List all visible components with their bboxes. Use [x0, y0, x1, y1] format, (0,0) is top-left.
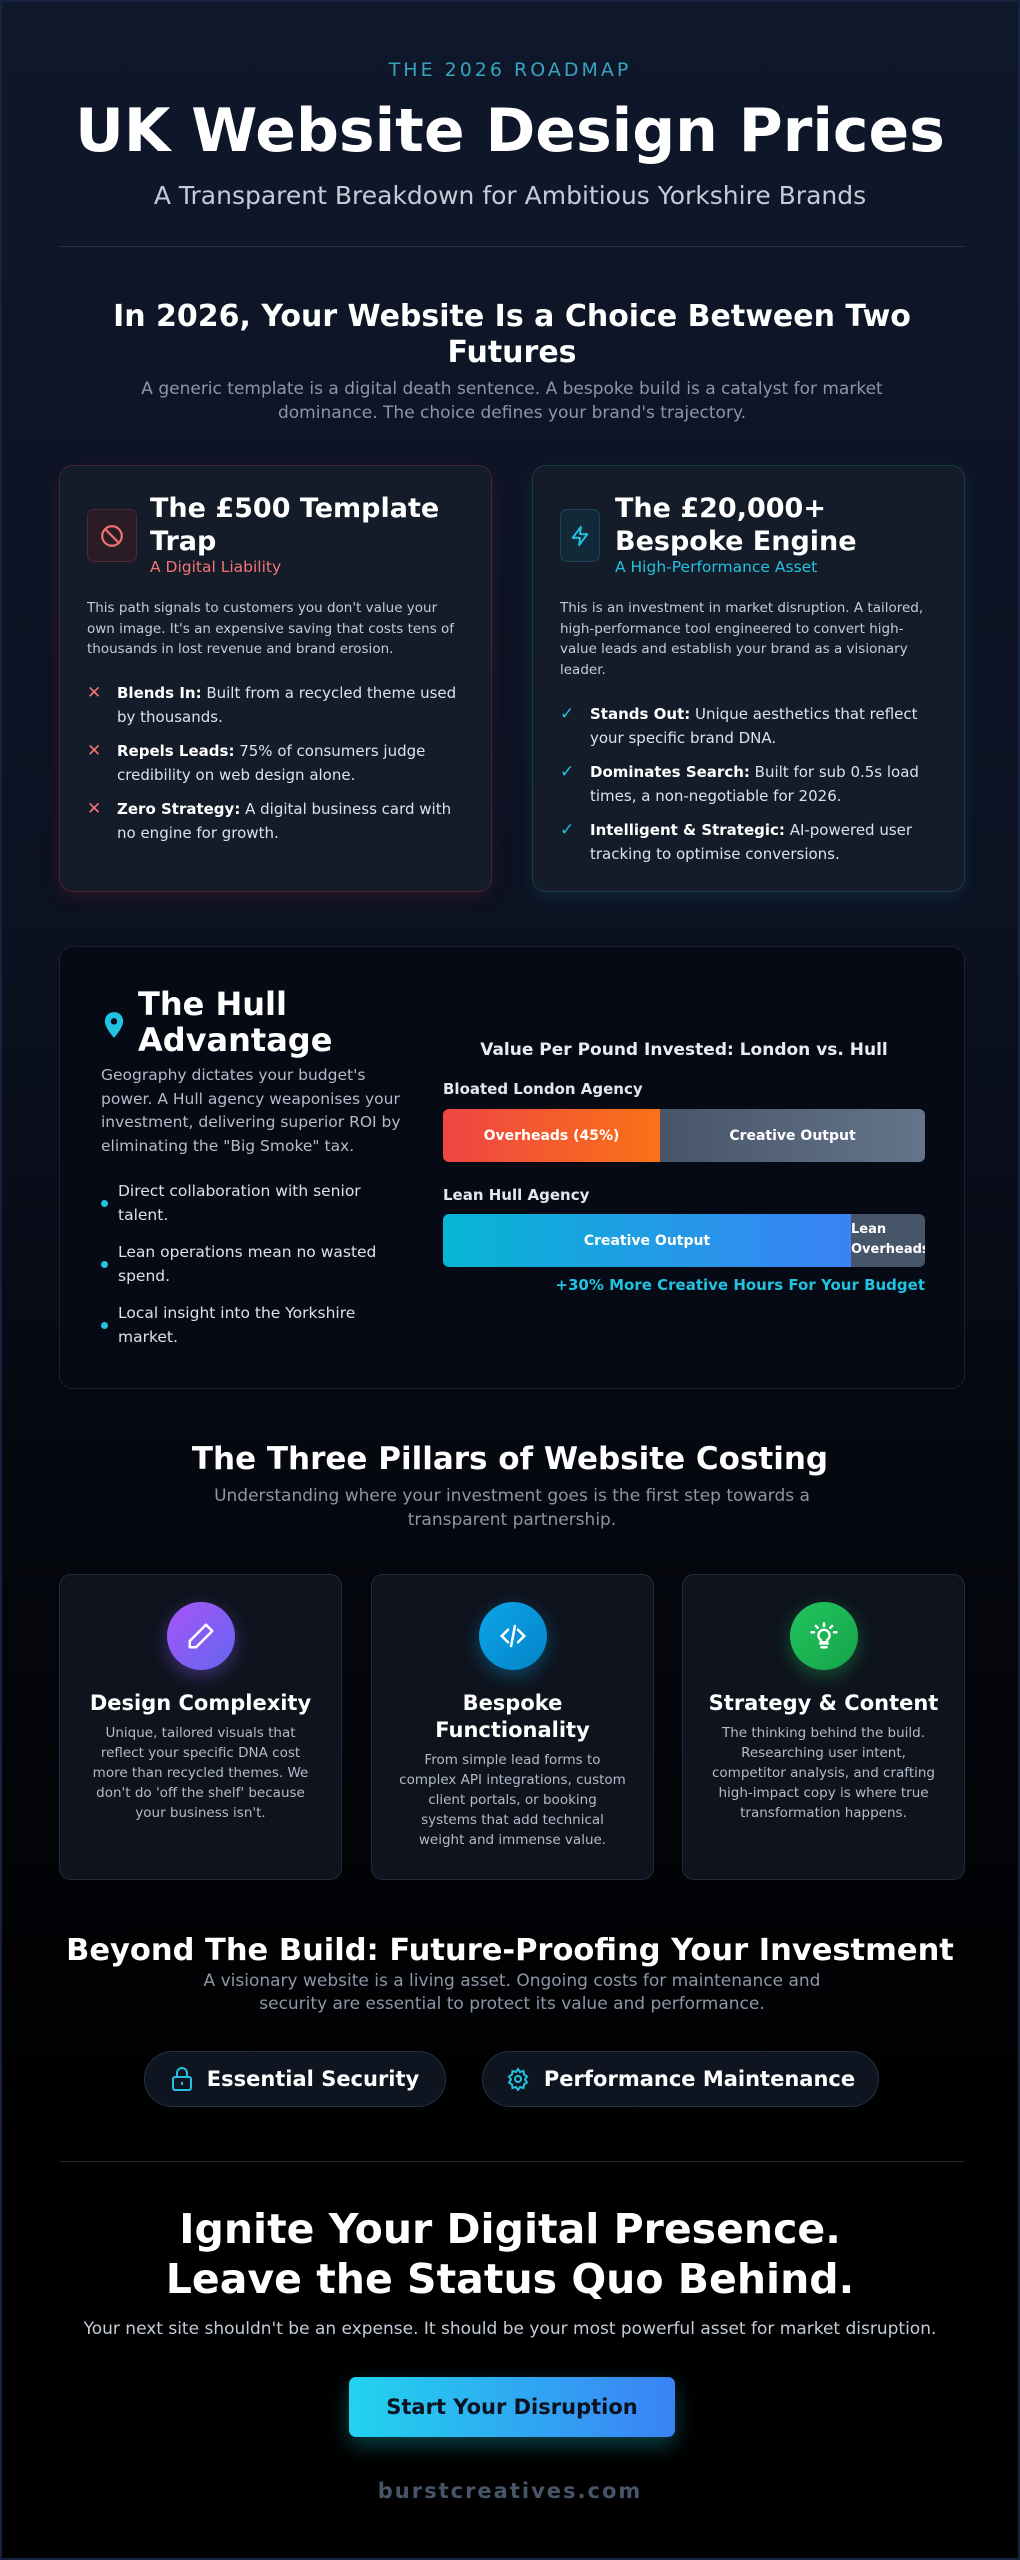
pill: maintenance: Performance Maintenance	[544, 2067, 855, 2091]
beyond text: A visionary website is a living asset. Ongoing costs for maintenance and security are essential to protect its value and performance.	[204, 1971, 820, 2014]
icon: pencil	[166, 1602, 234, 1670]
eyebrow: THE 2026 ROADMAP	[389, 59, 631, 81]
hull title: Advantage	[138, 1021, 332, 1059]
hull title	[138, 985, 332, 1059]
list: positives: ✓	[560, 762, 574, 782]
list: negatives	[87, 683, 456, 842]
hull text: Geography dictates your budget's power. A Hull agency weaponises your investment, delivering superior ROI by eliminating the "Big Smoke" tax.	[101, 1066, 401, 1154]
card body: This is an investment in market disruption. A tailored, high-performance tool engineered to convert high-value leads and establish your brand as a visionary leader.	[560, 600, 923, 678]
heading: beyond the build: Beyond The Build: Future-Proofing Your Investment	[66, 1933, 954, 1968]
pillar: bespoke functionality: Functionality	[435, 1718, 590, 1742]
pillar: strategy & content: The thinking behind the build. Researching user intent, competitor analysis, and crafting high-impact copy is where true transformation happens.	[712, 1725, 935, 1821]
list: negatives: Zero Strategy: A digital business card with no engine for growth.	[117, 800, 451, 842]
bar london: Overheads (45%)	[484, 1128, 619, 1144]
list: positives: Stands Out: Unique aesthetics that reflect your specific brand DNA.	[590, 705, 918, 747]
list: negatives: ✕	[87, 799, 101, 819]
button: Start Your Disruption	[386, 2395, 638, 2419]
hull bullets: Local insight into the Yorkshire market.	[118, 1304, 355, 1346]
hull bullets: Direct collaboration with senior talent.	[118, 1182, 361, 1224]
bar london: Creative Output	[729, 1128, 856, 1144]
pillar: design complexity: Unique, tailored visuals that reflect your specific DNA cost more than recycled themes. We don't do 'off the shelf' because your business isn't.	[93, 1725, 308, 1821]
hull bullets: Lean operations mean no wasted spend.	[118, 1243, 376, 1285]
card title: The £20,000+	[615, 493, 826, 524]
pillar: bespoke functionality: weight and immense value.	[419, 1832, 606, 1848]
pillar: bespoke functionality: From simple lead forms to	[424, 1752, 601, 1768]
card subtitle: A Digital Liability	[150, 558, 281, 576]
list: negatives: ✕	[87, 741, 101, 761]
panel: bespoke engine	[532, 465, 965, 892]
pillars intro: Understanding where your investment goes is the first step towards a transparent partnership.	[214, 1486, 810, 1530]
card title	[150, 493, 439, 557]
pillar: bespoke functionality: client portals, or booking	[428, 1792, 597, 1808]
footer: burstcreatives.com	[378, 2479, 642, 2503]
icon: code	[478, 1602, 546, 1670]
caption: +30% More Creative Hours For Your Budget	[555, 1276, 925, 1294]
card body: This path signals to customers you don't value your own image. It's an expensive saving that costs tens of thousands in lost revenue and brand erosion.	[87, 600, 454, 657]
icon: bulb	[790, 1602, 858, 1670]
list: positives: ✓	[560, 820, 574, 840]
card subtitle: A High-Performance Asset	[615, 558, 817, 576]
pillar: bespoke functionality: systems that add technical	[421, 1812, 604, 1828]
list: negatives: Repels Leads: 75% of consumers judge credibility on web design alone.	[117, 742, 425, 784]
pillar: design complexity: Design Complexity	[90, 1691, 311, 1715]
pillar: bespoke functionality: complex API integrations, custom	[399, 1772, 626, 1788]
hull title: The Hull	[138, 985, 287, 1023]
cta heading	[166, 2205, 854, 2303]
pill: security: Essential Security	[207, 2067, 419, 2091]
card title: Trap	[150, 526, 216, 557]
panel: template trap	[59, 465, 492, 892]
intro text: A generic template is a digital death sentence. A bespoke build is a catalyst for market dominance. The choice defines your brand's trajectory.	[141, 379, 883, 423]
label london: Bloated London Agency	[443, 1080, 643, 1098]
subtitle: A Transparent Breakdown for Ambitious Yorkshire Brands	[154, 181, 866, 210]
bar hull	[443, 1214, 925, 1267]
card title	[615, 493, 857, 557]
panel: hull advantage	[59, 946, 965, 1389]
title: UK Website Design Prices	[75, 96, 945, 166]
hull bullets	[101, 1182, 376, 1346]
list: negatives: Blends In: Built from a recycled theme used by thousands.	[117, 684, 456, 726]
button	[349, 2377, 675, 2437]
pillar: strategy & content: Strategy & Content	[709, 1691, 938, 1715]
list: positives: Intelligent & Strategic: AI-powered user tracking to optimise conversions.	[590, 821, 912, 863]
card title: Bespoke Engine	[615, 526, 857, 557]
chart title: Value Per Pound Invested: London vs. Hull	[480, 1040, 888, 1060]
label hull: Lean Hull Agency	[443, 1186, 589, 1204]
pill: security	[144, 2051, 446, 2107]
cta heading: Ignite Your Digital Presence.	[179, 2205, 841, 2253]
pill: maintenance	[482, 2051, 879, 2107]
bar hull: Lean	[851, 1222, 886, 1237]
list: negatives: ✕	[87, 683, 101, 703]
icon: ban	[87, 509, 137, 562]
icon: map pin	[104, 1012, 124, 1038]
card title: The £500 Template	[150, 493, 439, 524]
cta heading: Leave the Status Quo Behind.	[166, 2255, 854, 2303]
pillar: strategy & content	[682, 1574, 965, 1880]
bar hull: Creative Output	[584, 1232, 710, 1248]
list: positives: ✓	[560, 704, 574, 724]
list: positives: Dominates Search: Built for sub 0.5s load times, a non-negotiable for 2026.	[590, 763, 919, 805]
icon: bolt	[560, 509, 600, 562]
pillar: bespoke functionality	[371, 1574, 654, 1880]
bar chart	[443, 1040, 925, 1294]
pillar: design complexity	[59, 1574, 342, 1880]
pillar: bespoke functionality: Bespoke	[463, 1691, 562, 1715]
heading: two futures: In 2026, Your Website Is a Choice Between Two Futures	[113, 299, 911, 370]
bar london	[443, 1109, 925, 1162]
cta text: Your next site shouldn't be an expense. It should be your most powerful asset for market disruption.	[84, 2319, 936, 2339]
heading: pillars: The Three Pillars of Website Costing	[192, 1441, 828, 1477]
list: positives	[560, 704, 919, 863]
